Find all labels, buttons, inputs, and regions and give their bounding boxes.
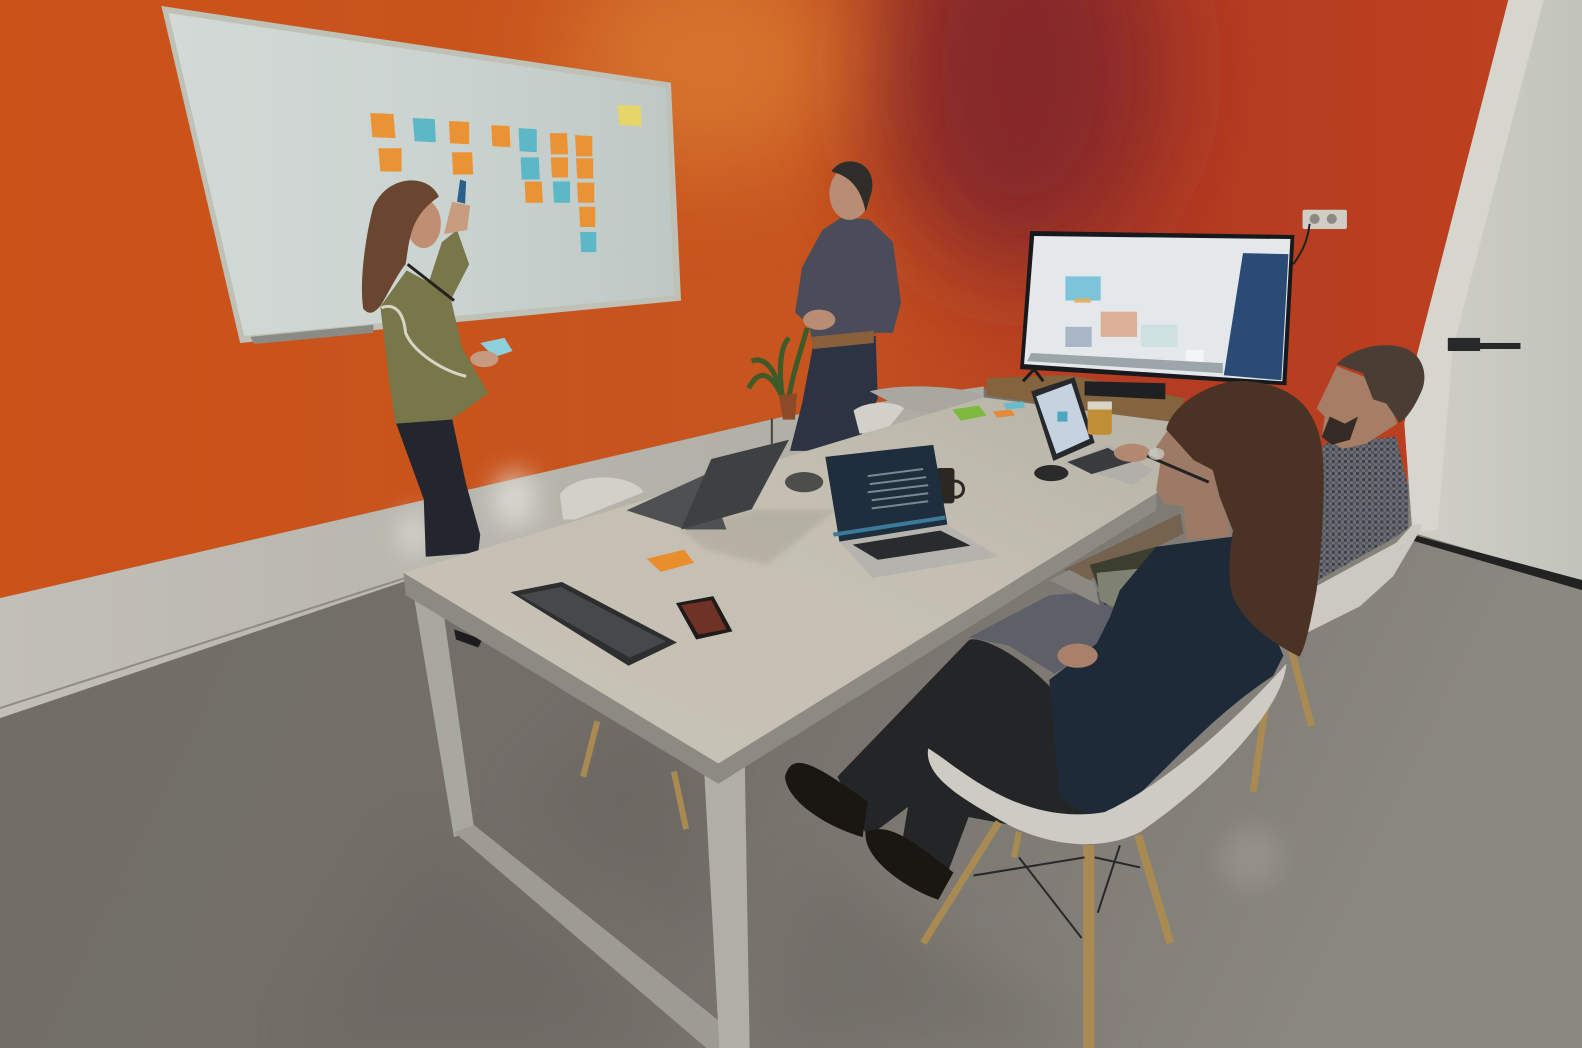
open laptop with code — [825, 445, 999, 578]
TV stand — [987, 375, 1185, 424]
orange wall — [0, 0, 1582, 605]
mouse and mug — [785, 465, 1068, 503]
potted plant — [749, 328, 807, 444]
white shell chair in foreground — [923, 664, 1286, 1048]
dark laptop on table — [627, 440, 789, 530]
far laptop — [1031, 377, 1153, 485]
glass of beer — [1088, 401, 1112, 435]
person: seated man — [1090, 345, 1424, 607]
white wainscot — [0, 386, 984, 718]
green and orange note pads — [647, 401, 1025, 572]
keyboard — [511, 582, 677, 666]
wall monitor with presentation — [1020, 231, 1294, 399]
white chair of seated man — [1253, 525, 1423, 792]
door — [1404, 0, 1582, 590]
conference table — [404, 397, 1211, 1048]
sticky notes — [370, 105, 642, 252]
white chairs behind table — [560, 386, 984, 829]
phone — [676, 596, 732, 639]
floor — [0, 383, 1582, 1048]
wall socket — [1293, 210, 1347, 264]
under-table floor and rug — [969, 513, 1183, 674]
person: seated woman — [785, 381, 1324, 900]
person: standing man — [790, 161, 901, 451]
person: standing woman — [362, 180, 513, 648]
whiteboard — [161, 6, 681, 344]
